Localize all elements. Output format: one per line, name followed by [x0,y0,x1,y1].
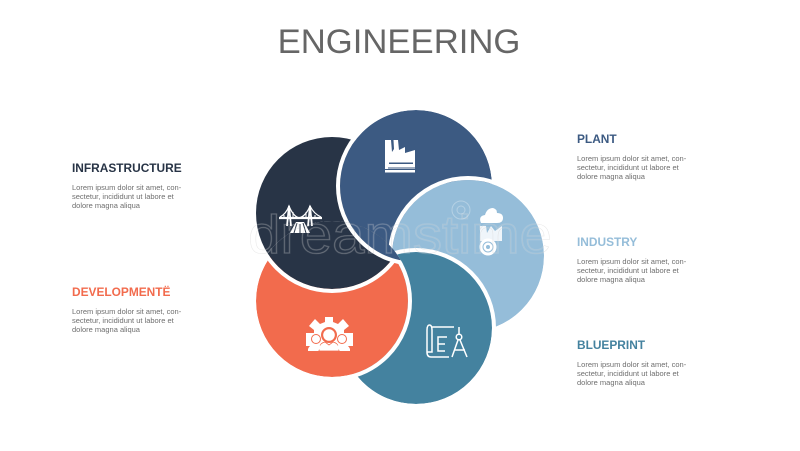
icon: blueprint and compass [427,325,467,357]
body text: development: sectetur, incididunt ut labore et [72,316,174,325]
watermark: dreamstime [248,205,552,265]
heading: plant: PLANT [577,132,617,146]
petal diagram [250,110,550,404]
body text: development [72,306,181,334]
body text: blueprint: dolore magna aliqua [577,378,645,387]
body text: blueprint: Lorem ipsum dolor sit amet, con- [577,360,686,368]
icon: bridge [279,206,322,233]
icon: team with gear [306,317,353,351]
petal: plant [340,110,492,262]
body text: infrastructure: sectetur, incididunt ut labore et [72,192,174,201]
plant petal edge [338,108,494,264]
petal: orange [256,225,408,377]
body text: blueprint: sectetur, incididunt ut labore et [577,369,679,378]
body text: industry: Lorem ipsum dolor sit amet, con- [577,256,686,266]
heading: blueprint: BLUEPRINT [577,338,645,352]
body text: blueprint [577,360,686,387]
body text: development: dolore magna aliqua [72,325,140,334]
overlap: navy over orange [268,221,404,293]
body text: industry [577,256,686,284]
text block: infrastructure [72,161,182,210]
body text: plant: sectetur, incididunt ut labore et [577,163,679,172]
body text: industry: sectetur, incididunt ut labore et [577,266,679,275]
text block: industry [577,235,686,284]
heading: industry: INDUSTRY [577,235,637,249]
body text: plant: dolore magna aliqua [577,172,645,181]
watermark: dreamstime [248,205,552,265]
heading: infrastructure: INFRASTRUCTURE [72,161,182,175]
body text: infrastructure: dolore magna aliqua [72,201,140,210]
body text: plant: Lorem ipsum dolor sit amet, con- [577,154,686,162]
heading: development: DEVELOPMENTË [72,285,170,299]
petal: navy [256,137,408,289]
orange petal edge [254,223,410,379]
text block: development [72,285,181,334]
body text: industry: dolore magna aliqua [577,275,645,284]
icon: factory [385,140,415,172]
body text: plant [577,154,686,181]
petal: industry [392,180,544,332]
petal: blueprint [340,252,492,404]
blueprint petal edge [338,250,494,406]
icon: smoke and gear [480,208,503,256]
text block: plant [577,132,686,181]
body text: infrastructure [72,182,181,210]
text block: blueprint [577,338,686,387]
title: ENGINEERING [278,23,520,61]
body text: development: Lorem ipsum dolor sit amet, con- [72,306,181,316]
industry petal edge [390,178,546,334]
body text: infrastructure: Lorem ipsum dolor sit amet, con- [72,182,181,192]
